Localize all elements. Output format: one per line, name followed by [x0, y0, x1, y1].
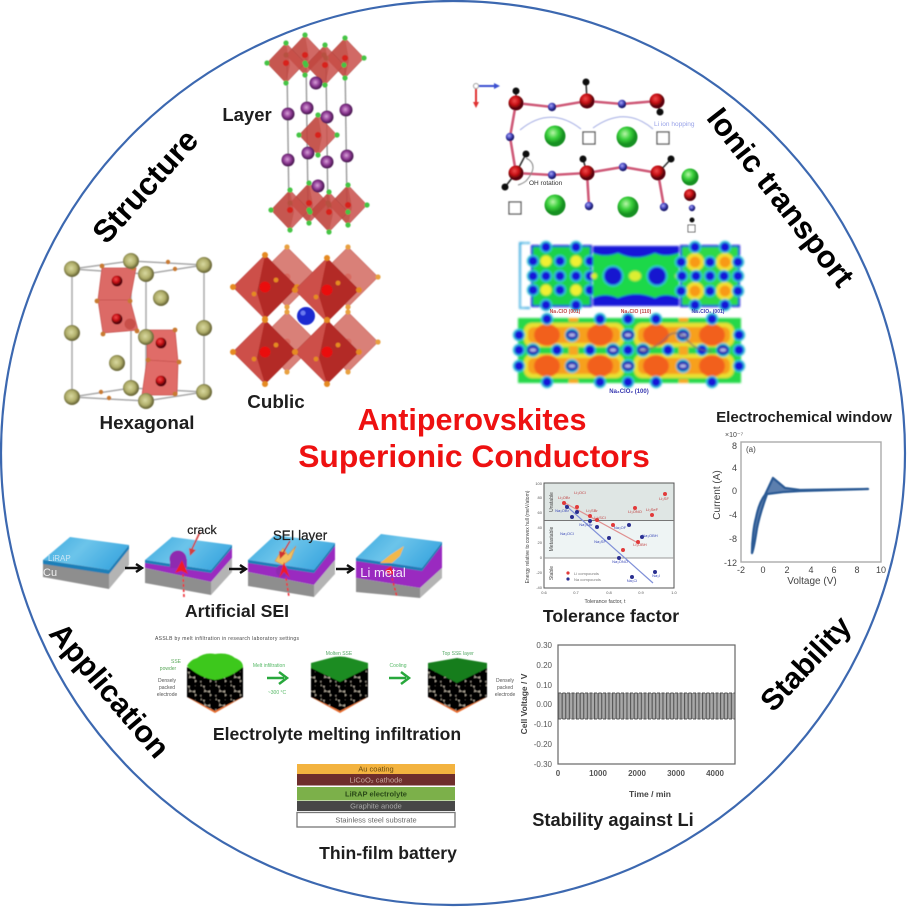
heading: Structure: Structure [85, 122, 205, 250]
labels for infiltration steps: Densely [158, 678, 177, 684]
scatter chart: 60 [538, 510, 543, 515]
voltage chart: 0.00 [536, 700, 553, 709]
labels for infiltration steps: Densely [496, 678, 515, 684]
panel: artificial SEI [43, 523, 442, 621]
scatter chart: Na₃OCl [560, 531, 574, 536]
cyclic voltammetry chart: -8 [729, 534, 737, 544]
hexagonal crystal structure [64, 253, 212, 409]
panel: electrolyte melting infiltration [155, 636, 515, 744]
cyclic voltammetry chart: ×10⁻⁷ [725, 432, 744, 439]
scatter chart: Li₃OBr [558, 495, 571, 500]
scatter chart: Na₃SBr [579, 522, 593, 527]
arrow: melt infiltration [267, 672, 287, 684]
labels for infiltration steps: Melt infiltration [253, 663, 285, 669]
heading: Ionic transport: Ionic transport [700, 101, 861, 294]
ionic transport atom model [473, 78, 698, 232]
panel: electrochemical window [712, 409, 892, 587]
map c [675, 241, 744, 311]
voltage chart: -0.30 [534, 760, 553, 769]
scatter chart: 40 [538, 525, 543, 530]
scatter chart: Li₃OCl [574, 490, 586, 495]
scatter chart [525, 481, 678, 605]
scatter chart: 0.9 [638, 590, 645, 595]
panel: thin-film battery [297, 764, 457, 863]
voltage chart: -0.20 [534, 740, 553, 749]
cube 2: molten SSE [311, 656, 368, 713]
cyclic voltammetry chart: 8 [732, 441, 737, 451]
scatter chart: Na₃SF [594, 539, 606, 544]
label: Li metal: Li metal [360, 565, 406, 580]
labels for infiltration steps: SSE [171, 659, 182, 665]
labels for infiltration steps: ~300 °C [268, 690, 287, 696]
cyclic voltammetry chart: Current (A) [712, 470, 723, 520]
labels for infiltration steps: electrode [495, 692, 515, 698]
scatter chart: -20 [536, 570, 543, 575]
layer stack: Au coating [358, 764, 394, 774]
label: Cu and LiRAP: Cu [43, 567, 57, 579]
scatter chart: Li₃OBH [633, 542, 647, 547]
cyclic voltammetry chart: -2 [737, 565, 745, 575]
labels for infiltration steps: powder [160, 666, 177, 672]
heading: Electrochemical window: Electrochemical window [716, 409, 892, 426]
scatter chart: Tolerance factor, t [585, 599, 626, 605]
voltage chart: 0.20 [536, 661, 553, 670]
label: Cublic: Cublic [247, 391, 305, 412]
scatter chart: 0 [540, 555, 543, 560]
map captions: Na₃ClO (110) [621, 309, 652, 315]
map d [513, 313, 745, 388]
arrow 1 [125, 564, 142, 572]
arrow 2 [229, 565, 246, 573]
cyclic voltammetry chart: (a) [746, 445, 756, 454]
cyclic voltammetry chart: 2 [784, 565, 790, 575]
map captions: Na₃ClO (001) [550, 309, 581, 315]
cyclic voltammetry chart: 6 [831, 565, 837, 575]
slab: SEI layer [248, 535, 335, 597]
voltage chart: Cell Voltage / V [519, 673, 529, 734]
scatter chart: 0.6 [541, 590, 548, 595]
arrow 3 [336, 565, 353, 573]
voltage chart: 0.10 [536, 681, 553, 690]
cyclic voltammetry chart: -4 [729, 510, 737, 520]
cyclic voltammetry chart: 0 [732, 486, 737, 496]
scatter chart: Na compounds [574, 577, 601, 582]
scatter chart: 0.8 [606, 590, 613, 595]
map b [591, 246, 681, 306]
label: SEI layer: SEI layer [273, 528, 328, 543]
label: Hexagonal: Hexagonal [100, 412, 194, 433]
scatter chart: Na₃ONO [612, 559, 628, 564]
cubic crystal structure [230, 244, 381, 387]
label: Cu and LiRAP: LiRAP [48, 554, 71, 563]
cyclic voltammetry chart: Voltage (V) [787, 576, 837, 587]
voltage chart: -0.10 [534, 720, 553, 729]
scatter chart: 100 [535, 481, 543, 486]
scatter chart: Na₃OBH [642, 533, 658, 538]
scatter chart: Li₃ONO [628, 509, 642, 514]
cube 3: top SSE layer [428, 658, 487, 713]
labels for infiltration steps: Cooling [390, 663, 407, 669]
scatter chart: Li₃SF [659, 496, 669, 501]
caption: ASSLB by melt infiltration in research laboratory settings [155, 636, 300, 642]
voltage chart: Time / min [629, 789, 671, 799]
slab: Li metal [356, 534, 442, 598]
scatter chart: 1.0 [671, 590, 678, 595]
scatter chart: Metastable [549, 527, 555, 551]
voltage chart: 2000 [628, 769, 646, 778]
cyclic voltammetry chart: 0 [760, 565, 766, 575]
scatter chart: 20 [538, 540, 543, 545]
heading: Application: Application [42, 616, 176, 765]
slab: LiRAP on Cu [43, 537, 129, 589]
cube 1: SSE powder [187, 654, 243, 713]
map captions: Na₃ClO₂ (001) [692, 309, 725, 315]
heading: Stability: Stability [754, 610, 858, 718]
labels for infiltration steps [157, 651, 515, 698]
scatter chart: Energy relative to convex hull (meV/atom) [525, 490, 531, 583]
scatter chart: Na₃OF [614, 525, 627, 530]
labels for infiltration steps: Top SSE layer [442, 651, 474, 657]
scatter chart: Li compounds [574, 571, 599, 576]
cyclic voltammetry chart [712, 432, 886, 587]
layer stack: Graphite anode [350, 802, 402, 810]
scatter chart: Unstable [549, 492, 555, 512]
layer stack [297, 764, 455, 827]
heading: Thin-film battery: Thin-film battery [319, 843, 457, 863]
scatter chart: Li₃SCl [594, 515, 606, 520]
labels for infiltration steps: packed [497, 685, 513, 691]
voltage chart [519, 641, 735, 799]
labels for infiltration steps: Molten SSE [326, 651, 353, 657]
voltage chart: 4000 [706, 769, 724, 778]
label: crack: crack [187, 523, 218, 537]
label: Li ion hopping: Li ion hopping [654, 121, 695, 128]
labels for infiltration steps: electrode [157, 692, 177, 698]
cyclic voltammetry chart: 8 [854, 565, 860, 575]
scatter chart: 0.7 [573, 590, 580, 595]
title [298, 403, 650, 474]
voltage chart: 0.30 [536, 641, 553, 650]
panel: stability against Li [519, 641, 735, 830]
cyclic voltammetry chart: 10 [876, 565, 886, 575]
scatter chart: Li₃SeF [646, 507, 659, 512]
axis icon [473, 83, 500, 108]
layer stack: LiRAP electrolyte [345, 790, 407, 798]
voltage chart: 0 [556, 769, 561, 778]
slab: crack [145, 532, 232, 597]
label: Layer: Layer [222, 104, 272, 125]
cyclic voltammetry chart: 4 [808, 565, 814, 575]
title: Antiperovskites [358, 403, 586, 437]
charge density maps [513, 241, 745, 388]
scatter chart: 80 [538, 495, 543, 500]
arrow: cooling [389, 672, 409, 684]
voltage chart: 1000 [589, 769, 607, 778]
label: Cu and LiRAP [43, 554, 71, 579]
title: Superionic Conductors [298, 438, 650, 474]
layer crystal structure [264, 32, 370, 235]
map captions [550, 309, 725, 395]
heading: Tolerance factor: Tolerance factor [543, 606, 679, 626]
scatter chart: Na₃I [652, 573, 660, 578]
panel: tolerance factor [525, 481, 679, 626]
map captions: Na₃ClO₂ (100) [609, 389, 649, 395]
scatter chart: Li₃SBr [586, 508, 598, 513]
heading: Artificial SEI: Artificial SEI [185, 601, 289, 621]
cyclic voltammetry chart: -12 [724, 558, 737, 568]
labels for infiltration steps: packed [159, 685, 175, 691]
scatter chart: Na₃Cl [627, 578, 637, 583]
map a [527, 241, 596, 311]
label: OH rotation: OH rotation [529, 180, 563, 187]
scatter chart: Stable [549, 566, 555, 580]
layer stack: LiCoO₂ cathode [350, 776, 402, 784]
scatter chart: Na₃OBr [555, 508, 570, 513]
layer stack: Stainless steel substrate [335, 816, 417, 824]
scatter chart: -40 [536, 585, 543, 590]
voltage chart: 3000 [667, 769, 685, 778]
cyclic voltammetry chart: 4 [732, 463, 737, 473]
heading: Stability against Li: Stability against Li [532, 809, 694, 830]
colour scale [520, 243, 530, 308]
heading: Electrolyte melting infiltration: Electrolyte melting infiltration [213, 724, 461, 744]
